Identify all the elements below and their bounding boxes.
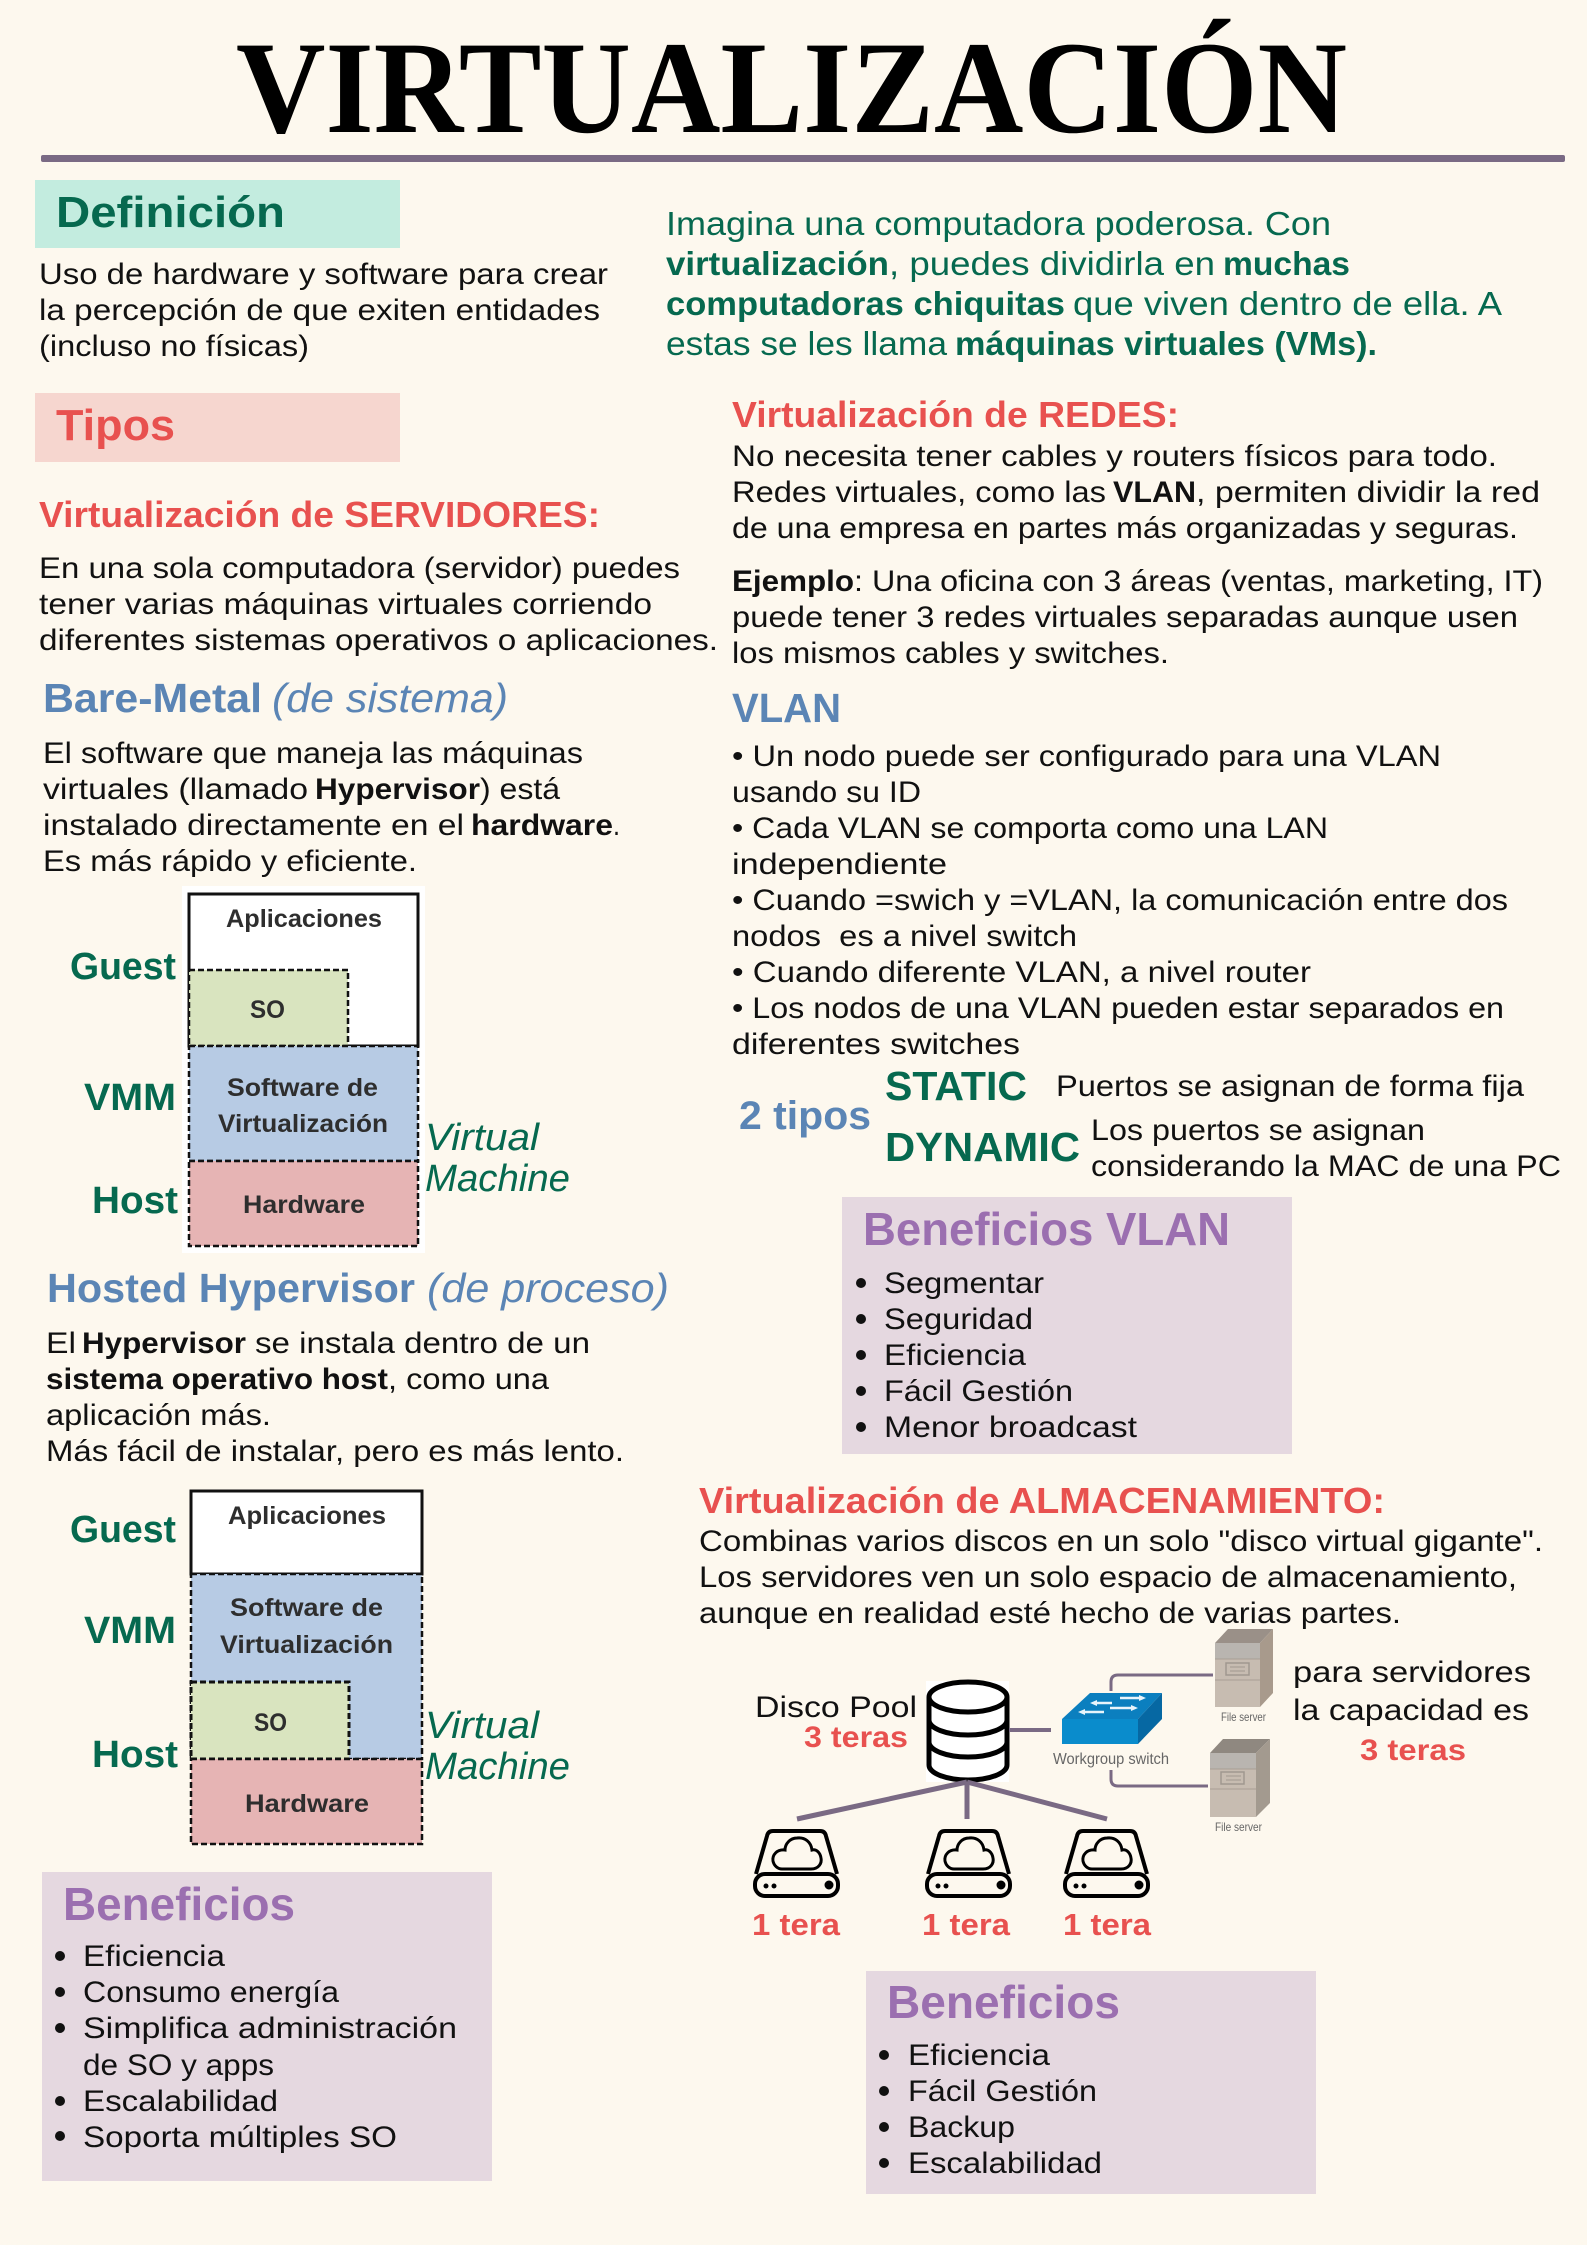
text block: definición: Uso de hardware y software para crear: [39, 258, 608, 291]
label: disco pool: 3 teras: [804, 1721, 908, 1754]
list: vlan: • Un nodo puede ser configurado para una VLAN: [732, 740, 1441, 773]
list: beneficios servidores: Simplifica administración: [83, 2012, 457, 2045]
heading: servidores: Virtualización de SERVIDORES:: [39, 494, 600, 535]
diagram: almacenamiento: [752, 1629, 1531, 1942]
section: bare-metal: [43, 675, 620, 878]
list: vlan: • Cuando diferente VLAN, a nivel router: [732, 956, 1311, 989]
text block: redes: de una empresa en partes más organizadas y seguras.: [732, 512, 1518, 545]
text block: bare-metal: Es más rápido y eficiente.: [43, 845, 417, 878]
vlan types: Puertos se asignan de forma fija: [1056, 1070, 1524, 1103]
text block: analogía: , puedes dividirla en: [889, 245, 1215, 282]
text block: servidores: diferentes sistemas operativos o aplicaciones.: [39, 624, 718, 657]
list: vlan: diferentes switches: [732, 1028, 1020, 1061]
list: beneficios servidores: Consumo energía: [83, 1976, 339, 2009]
text block: servidores: En una sola computadora (servidor) puedes: [39, 552, 680, 585]
text block: hosted hypervisor: El: [46, 1327, 76, 1360]
list: beneficios almacenamiento: Backup: [908, 2111, 1015, 2144]
heading: redes: Virtualización de REDES:: [732, 394, 1179, 435]
text block: ejemplo: [732, 565, 1543, 670]
list: beneficios servidores: [55, 1940, 457, 2154]
label: virtual machine: Machine: [425, 1746, 570, 1788]
labels: guest, vmm, host: Host: [92, 1734, 178, 1776]
text block: redes: [732, 440, 1540, 545]
text block: hosted hypervisor: aplicación más.: [46, 1399, 271, 1432]
text block: bare-metal: .: [613, 809, 620, 842]
layer: so host: [191, 1682, 349, 1759]
heading: beneficios: Beneficios: [63, 1878, 295, 1930]
labels: guest, vmm, host: VMM: [84, 1077, 176, 1119]
heading: tipos: [35, 393, 400, 462]
list: beneficios servidores: Escalabilidad: [83, 2085, 278, 2118]
list: beneficios servidores: Eficiencia: [83, 1940, 225, 1973]
labels: guest, vmm, host: Host: [92, 1180, 178, 1222]
heading: hosted hypervisor: (de proceso): [427, 1265, 669, 1311]
layer: hardware: [189, 1161, 418, 1246]
label: virtual machine: Machine: [425, 1158, 570, 1200]
text block: hosted hypervisor: se instala dentro de un: [255, 1327, 590, 1360]
heading: definición: Definición: [56, 188, 285, 237]
heading: vlan: VLAN: [732, 685, 841, 731]
text block: redes: Redes virtuales, como las: [732, 476, 1106, 509]
heading: tipos: Tipos: [56, 401, 175, 450]
text block: bare-metal: ) está: [480, 773, 560, 806]
label: disco pool: Disco Pool: [755, 1691, 917, 1724]
layer: software de virtualización: [189, 1046, 418, 1161]
title: VIRTUALIZACIÓN: [236, 14, 1347, 161]
icon: file server 2: [1210, 1739, 1270, 1834]
layer: software de virtualización: Virtualización: [220, 1631, 393, 1659]
text block: bare-metal: virtuales (llamado: [43, 773, 308, 806]
heading: definición: [35, 180, 400, 248]
labels: 1 tera: [752, 1907, 1152, 1942]
text block: ejemplo: : Una oficina con 3 áreas (ventas, marketing, IT): [854, 565, 1543, 598]
list: beneficios almacenamiento: [879, 2039, 1102, 2180]
icon: file server 1: File server: [1221, 1710, 1266, 1724]
list: beneficios vlan: Fácil Gestión: [884, 1375, 1073, 1408]
text block: almacenamiento: aunque en realidad esté hecho de varias partes.: [699, 1597, 1401, 1630]
icon: workgroup switch: [1053, 1693, 1169, 1768]
heading: hosted hypervisor: [47, 1265, 669, 1311]
text block: almacenamiento: Los servidores ven un solo espacio de almacenamiento,: [699, 1561, 1517, 1594]
text block: bare-metal: instalado directamente en el: [43, 809, 464, 842]
layer: software de virtualización: Software de: [227, 1074, 378, 1102]
layer: software de virtualización: Virtualización: [218, 1110, 388, 1138]
section: virtualización de servidores: [39, 494, 718, 657]
text block: ejemplo: puede tener 3 redes virtuales separadas aunque usen: [732, 601, 1518, 634]
section: virtualización de almacenamiento: [699, 1480, 1543, 1630]
labels: 1 tera: 1 tera: [752, 1907, 841, 1942]
vlan types: 2 tipos: [739, 1094, 871, 1138]
list: vlan: • Los nodos de una VLAN pueden estar separados en: [732, 992, 1504, 1025]
layer: aplicaciones: Aplicaciones: [226, 905, 382, 933]
layer: hardware: Hardware: [245, 1790, 369, 1818]
text block: analogía: máquinas virtuales (VMs).: [955, 325, 1377, 362]
text block: definición: [39, 258, 608, 363]
text block: analogía: Imagina una computadora poderosa. Con: [666, 205, 1331, 242]
note: capacidad para servidores: la capacidad es: [1293, 1694, 1529, 1727]
vlan types: considerando la MAC de una PC: [1091, 1150, 1561, 1183]
heading: beneficios vlan: Beneficios VLAN: [863, 1203, 1230, 1255]
connectors: [797, 1675, 1213, 1819]
note: capacidad para servidores: [1293, 1656, 1531, 1767]
labels: guest, vmm, host: [70, 946, 178, 1222]
text block: hosted hypervisor: [46, 1327, 624, 1468]
heading: almacenamiento: Virtualización de ALMACENAMIENTO:: [699, 1480, 1385, 1521]
panel: beneficios almacenamiento: [866, 1971, 1316, 2194]
list: beneficios almacenamiento: Fácil Gestión: [908, 2075, 1097, 2108]
list: vlan: usando su ID: [732, 776, 921, 809]
list: beneficios vlan: Menor broadcast: [884, 1411, 1138, 1444]
text block: analogía: muchas: [1223, 245, 1350, 282]
layer: hardware: [191, 1759, 422, 1844]
text block: hosted hypervisor: Más fácil de instalar, pero es más lento.: [46, 1435, 624, 1468]
label: virtual machine: [425, 1117, 570, 1200]
text block: bare-metal: El software que maneja las máquinas: [43, 737, 583, 770]
labels: guest, vmm, host: Guest: [70, 946, 176, 988]
text block: analogía: estas se les llama: [666, 325, 948, 362]
list: beneficios vlan: Seguridad: [884, 1303, 1033, 1336]
labels: 1 tera: 1 tera: [922, 1907, 1011, 1942]
label: virtual machine: Virtual: [425, 1117, 541, 1159]
diagram: hosted stack: [191, 1491, 422, 1844]
text block: servidores: [39, 552, 718, 657]
icon: cloud drive 3: [1065, 1831, 1148, 1896]
labels: guest, vmm, host: [70, 1509, 178, 1776]
text block: hosted hypervisor: Hypervisor: [82, 1327, 246, 1360]
text block: analogía: que viven dentro de ella. A: [1073, 285, 1502, 322]
section: virtualización de redes: [732, 394, 1543, 670]
text block: ejemplo: Ejemplo: [732, 565, 854, 598]
list: beneficios servidores: de SO y apps: [83, 2049, 274, 2082]
text block: analogía: virtualización: [666, 245, 889, 282]
layer: so host: SO: [254, 1709, 287, 1737]
icon: cloud drive 1: [755, 1831, 838, 1896]
list: beneficios servidores: Soporta múltiples SO: [83, 2121, 397, 2154]
layer: so guest: [189, 970, 348, 1046]
section: hosted hypervisor: [46, 1265, 669, 1468]
icon: workgroup switch: Workgroup switch: [1053, 1751, 1169, 1768]
text block: almacenamiento: [699, 1525, 1543, 1630]
text block: definición: la percepción de que exiten entidades: [39, 294, 600, 327]
label: virtual machine: [425, 1705, 570, 1788]
note: capacidad para servidores: 3 teras: [1360, 1734, 1466, 1767]
text block: ejemplo: los mismos cables y switches.: [732, 637, 1169, 670]
text block: hosted hypervisor: , como una: [388, 1363, 549, 1396]
heading: bare-metal: Bare-Metal: [43, 675, 262, 721]
list: beneficios vlan: Segmentar: [884, 1267, 1044, 1300]
layer: hardware: Hardware: [243, 1191, 365, 1219]
text block: bare-metal: Hypervisor: [315, 773, 480, 806]
layer: software de virtualización: [191, 1574, 422, 1759]
icon: file server 2: File server: [1215, 1820, 1262, 1834]
list: vlan: • Cada VLAN se comporta como una LAN: [732, 812, 1328, 845]
list: vlan: [732, 740, 1508, 1061]
section: vlan: [732, 685, 1561, 1183]
text block: redes: VLAN: [1113, 476, 1196, 509]
panel: beneficios servidores: [42, 1872, 492, 2181]
label: disco pool: [755, 1691, 917, 1754]
icon: file server 1: [1215, 1629, 1273, 1724]
icon: cloud drive 2: [927, 1831, 1010, 1896]
list: beneficios almacenamiento: Escalabilidad: [908, 2147, 1102, 2180]
list: vlan: independiente: [732, 848, 947, 881]
list: beneficios almacenamiento: Eficiencia: [908, 2039, 1050, 2072]
vlan types: [739, 1063, 1561, 1183]
vlan types: Los puertos se asignan: [1091, 1114, 1425, 1147]
text block: servidores: tener varias máquinas virtuales corriendo: [39, 588, 652, 621]
panel: beneficios vlan: [842, 1197, 1292, 1454]
heading: beneficios: Beneficios: [887, 1976, 1120, 2028]
labels: guest, vmm, host: VMM: [84, 1610, 176, 1652]
text block: hosted hypervisor: sistema operativo host: [46, 1363, 388, 1396]
text block: analogía: [666, 205, 1502, 362]
text block: analogía: computadoras chiquitas: [666, 285, 1065, 322]
text block: definición: (incluso no físicas): [39, 330, 309, 363]
text block: redes: , permiten dividir la red: [1196, 476, 1540, 509]
note: capacidad para servidores: para servidores: [1293, 1656, 1531, 1689]
list: vlan: nodos es a nivel switch: [732, 920, 1077, 953]
list: beneficios vlan: Eficiencia: [884, 1339, 1026, 1372]
labels: 1 tera: 1 tera: [1063, 1907, 1152, 1942]
diagram: bare-metal stack: [182, 886, 425, 1253]
list: vlan: • Cuando =swich y =VLAN, la comunicación entre dos: [732, 884, 1508, 917]
layer: so guest: SO: [250, 996, 285, 1024]
label: virtual machine: Virtual: [425, 1705, 541, 1747]
text block: almacenamiento: Combinas varios discos en un solo "disco virtual gigante".: [699, 1525, 1543, 1558]
text block: redes: No necesita tener cables y routers físicos para todo.: [732, 440, 1497, 473]
heading: hosted hypervisor: Hosted Hypervisor: [47, 1265, 415, 1311]
labels: guest, vmm, host: Guest: [70, 1509, 176, 1551]
text block: bare-metal: [43, 737, 620, 878]
vlan types: DYNAMIC: [885, 1124, 1080, 1170]
layer: aplicaciones: Aplicaciones: [228, 1502, 386, 1530]
icon: database: [926, 1681, 1009, 1782]
panel: definición: [35, 180, 608, 363]
layer: software de virtualización: Software de: [230, 1594, 383, 1622]
text block: bare-metal: hardware: [471, 809, 613, 842]
heading: bare-metal: (de sistema): [272, 675, 508, 721]
list: beneficios vlan: [856, 1267, 1138, 1444]
heading: bare-metal: [43, 675, 508, 721]
vlan types: STATIC: [885, 1063, 1027, 1109]
